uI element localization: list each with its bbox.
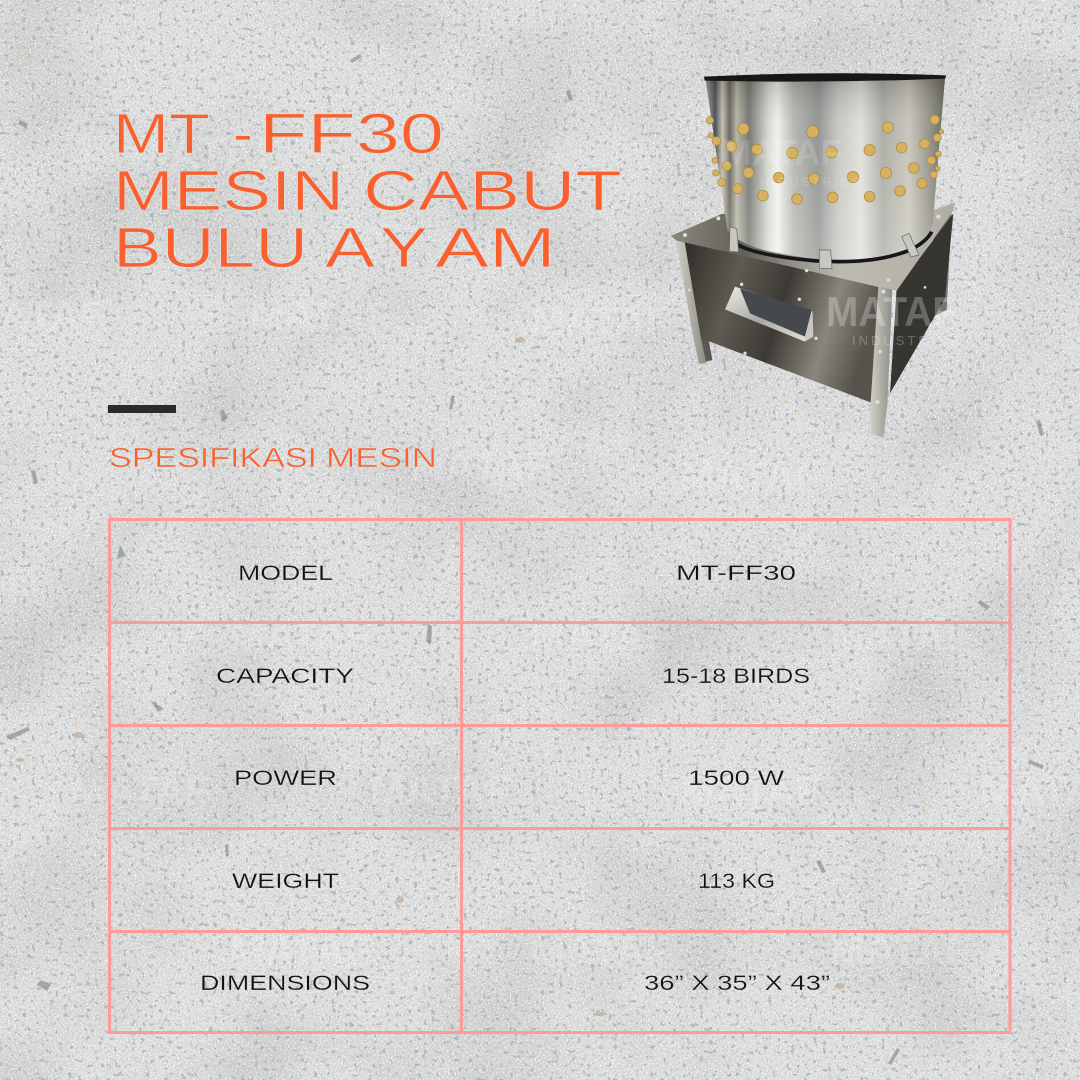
title: A <box>325 216 375 280</box>
title: Y <box>380 216 428 280</box>
watermarks: MATAF <box>370 767 511 814</box>
brackets <box>729 227 919 268</box>
watermarks: MATAF <box>680 452 821 499</box>
watermarks: MATAF <box>830 612 971 659</box>
machine watermark: INDUSTRIES <box>760 175 863 189</box>
table rows: 113 KG <box>698 870 775 893</box>
watermarks: MATAF <box>70 767 211 814</box>
table rows: CAPACITY <box>216 665 354 688</box>
table rows: WEIGHT <box>232 870 339 893</box>
subheading: MESIN <box>326 442 437 473</box>
table rows: 36” X 35” X 43” <box>644 972 830 995</box>
subheading <box>109 442 437 473</box>
table rows: MT-FF30 <box>676 562 796 585</box>
bolts <box>683 215 940 404</box>
back leg <box>933 213 952 317</box>
title: CABUT <box>363 159 622 223</box>
watermarks: MATAF <box>230 612 371 659</box>
table grid <box>109 519 1010 1033</box>
table rows: POWER <box>234 767 337 790</box>
watermarks: MATAF <box>230 927 371 974</box>
title <box>113 102 622 280</box>
watermarks: MATAF <box>530 612 671 659</box>
title: BULU <box>113 216 308 280</box>
machine watermark: MATAF <box>722 132 843 173</box>
watermarks: MATAF <box>680 767 821 814</box>
drum <box>704 73 946 262</box>
watermarks: MATAF <box>250 292 391 339</box>
subheading: SPESIFIKASI <box>109 442 317 473</box>
watermarks: MATAF <box>830 927 971 974</box>
table rows: DIMENSIONS <box>200 972 370 995</box>
left rear leg <box>695 333 712 363</box>
left front leg <box>676 241 706 364</box>
table rows: 1500 W <box>688 767 784 790</box>
specification table <box>109 519 1010 1033</box>
title: FF30 <box>259 102 444 166</box>
title: - <box>233 102 253 166</box>
top plate <box>671 203 955 291</box>
right side panel <box>890 213 953 393</box>
machine watermark <box>722 132 961 348</box>
title: MESIN <box>113 159 344 223</box>
drum rim <box>704 73 946 82</box>
watermarks: MATAF <box>530 297 671 344</box>
title: MT <box>113 102 210 166</box>
front corner leg <box>871 286 892 438</box>
accent bar <box>108 405 176 413</box>
rubber fingers <box>706 115 944 204</box>
watermarks: MATAF <box>410 442 551 489</box>
watermarks: ATAF <box>0 292 106 339</box>
table rows: 15-18 BIRDS <box>662 665 810 688</box>
machine watermark: INDUSTRIES <box>852 333 961 348</box>
watermarks <box>0 128 1080 974</box>
title: AM <box>435 216 556 280</box>
watermarks: MATAF <box>530 927 671 974</box>
watermarks: MATAF <box>130 128 284 180</box>
front panel <box>683 242 885 403</box>
machine photo: stainless plucker <box>671 73 955 438</box>
table rows: MODEL <box>238 562 333 585</box>
chute <box>725 287 813 342</box>
machine watermark: MATAF <box>826 288 956 335</box>
lower band <box>737 232 932 262</box>
table rows <box>200 562 830 995</box>
